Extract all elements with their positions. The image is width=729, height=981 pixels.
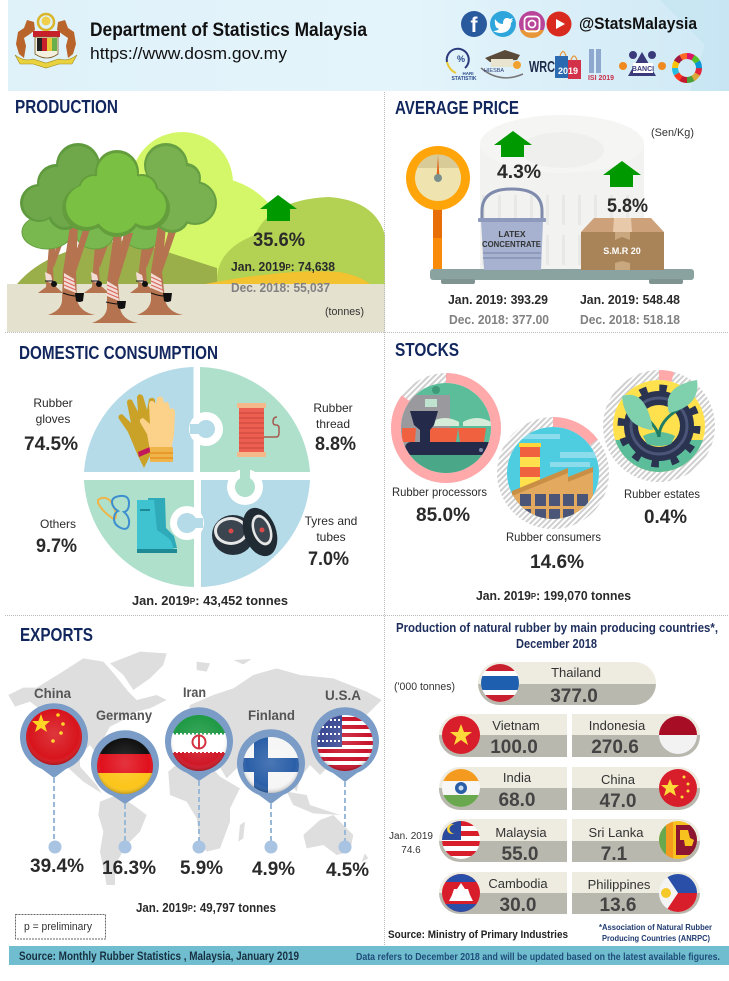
arrow: latex up (494, 131, 532, 157)
pill: china (572, 767, 700, 812)
value: usa: 4.5% (326, 860, 369, 881)
unit: tonnes: (tonnes) (325, 306, 364, 318)
label: rubber gloves: gloves (36, 412, 70, 426)
arrow: smr up (603, 161, 641, 187)
values: latex prices (448, 293, 549, 327)
label: tyres and tubes: 7.0% (308, 549, 349, 570)
left tree (20, 143, 114, 315)
label: others: 9.7% (36, 536, 77, 557)
values: smr prices (580, 293, 680, 327)
total: domestic consumption: P (190, 597, 196, 606)
icon: twitter (490, 11, 516, 37)
illustration: stacked rubber sheets (480, 115, 644, 270)
icon: facebook: f (470, 14, 478, 37)
pill: sri lanka (572, 819, 700, 865)
heading: stocks: STOCKS (395, 340, 459, 360)
total: stocks: Jan. 2019 (476, 589, 532, 603)
total: stocks: : 199,070 tonnes (536, 589, 631, 603)
value: finland: 4.9% (252, 859, 295, 880)
label: rubber processors: 85.0% (416, 505, 470, 526)
legend: preliminary (16, 914, 106, 939)
value: production change: 35.6% (253, 230, 305, 251)
label: rubber estates: 0.4% (644, 507, 687, 528)
value: germany: 16.3% (102, 858, 156, 879)
illustration: rubber plantation (7, 132, 385, 332)
right tree (137, 143, 217, 315)
back trees (22, 215, 162, 293)
value: iran: 5.9% (180, 858, 223, 879)
heading: production by country: December 2018 (516, 637, 597, 651)
event logos (447, 49, 703, 84)
value: january production: P (285, 263, 291, 272)
value: january production: Jan. 2019 (231, 260, 287, 274)
label: rubber gloves: 74.5% (24, 434, 78, 455)
label: rubber thread: 8.8% (315, 434, 356, 455)
pill: malaysia: 55.0 (502, 844, 538, 865)
legend: preliminary: p = preliminary (24, 921, 92, 933)
puzzle pie chart (84, 367, 310, 587)
social handle: @StatsMalaysia (579, 14, 697, 33)
total: exports: P (188, 904, 193, 913)
label: rubber processors: Rubber processors (392, 485, 487, 499)
icon: facebook (461, 11, 487, 37)
source: monthly statistics: Source: Monthly Rubber Statistics , Malaysia, January 2019 (19, 949, 299, 963)
label: concentrate: CONCENTRATE (482, 239, 541, 249)
label: rubber thread: Rubber (313, 401, 353, 415)
pill: china: 47.0 (600, 791, 636, 812)
unit: thousand tonnes: ('000 tonnes) (394, 681, 455, 693)
pill: sri lanka: Sri Lanka (589, 825, 644, 840)
label: china: China (34, 686, 71, 701)
header banner (8, 0, 729, 91)
pin: china (20, 686, 88, 877)
label: rubber thread: thread (316, 417, 350, 431)
chart: rubber estates (608, 375, 710, 480)
pill: thailand: Thailand (551, 665, 601, 680)
pill: china: China (601, 772, 636, 787)
pill: india: 68.0 (499, 790, 535, 811)
panel: domestic consumption (19, 343, 357, 608)
unit: sen per kg: (Sen/Kg) (651, 127, 694, 139)
panel: average price (395, 98, 694, 327)
note: anrpc (599, 923, 712, 943)
world map (8, 652, 382, 885)
total: exports: : 49,797 tonnes (193, 901, 276, 915)
label: others: Others (40, 517, 76, 531)
pill: india: India (503, 770, 532, 785)
source: ministry: Source: Ministry of Primary Industries (388, 929, 568, 941)
label: germany: Germany (96, 708, 152, 723)
label: tyres and tubes: tubes (316, 530, 346, 544)
pin: usa (311, 688, 379, 881)
event logos: ISI 2019 (588, 75, 614, 82)
heading: exports: EXPORTS (20, 625, 93, 645)
value: december production: Dec. 2018: 55,037 (231, 281, 330, 295)
note: malaysia january value (389, 831, 433, 856)
website url: https://www.dosm.gov.my (90, 44, 288, 63)
pin: germany (91, 708, 159, 879)
pill: indonesia: Indonesia (589, 718, 646, 733)
icon: thread spool (237, 403, 279, 457)
pill: cambodia (439, 872, 567, 916)
pill: malaysia: Malaysia (495, 825, 547, 840)
label: rubber consumers (506, 530, 601, 573)
chart: rubber processors (396, 378, 505, 478)
note: anrpc: *Association of Natural Rubber (599, 923, 712, 932)
icon: coat of arms (15, 14, 77, 68)
illustration: weighing scale (406, 146, 694, 284)
event logos: HIESBA (484, 68, 504, 74)
event logos: 2019 (558, 66, 578, 76)
panel: exports (8, 625, 382, 939)
heading: domestic consumption: DOMESTIC CONSUMPTION (19, 343, 218, 363)
total: domestic consumption: Jan. 2019 (132, 594, 188, 608)
value: latex change: 4.3% (497, 162, 541, 183)
icon: youtube (546, 12, 572, 36)
values: smr prices: Dec. 2018: 518.18 (580, 313, 680, 327)
total: stocks: P (531, 592, 537, 601)
values: smr prices: Jan. 2019: 548.48 (580, 293, 680, 307)
note: malaysia january value: Jan. 2019 (389, 831, 433, 842)
label: rubber thread (313, 401, 356, 455)
illustration: latex bucket (478, 189, 546, 270)
label: smr 20: S.M.R 20 (603, 246, 641, 256)
panel: production by country (388, 621, 718, 943)
total: domestic consumption: : 43,452 tonnes (195, 594, 288, 608)
values: latex prices: Dec. 2018: 377.00 (449, 313, 549, 327)
pill: thailand: 377.0 (550, 686, 598, 707)
values: latex prices: Jan. 2019: 393.29 (448, 293, 548, 307)
label: usa: U.S.A (325, 688, 361, 703)
label: rubber estates (624, 487, 700, 528)
heading: department name: Department of Statistics Malaysia (90, 20, 367, 41)
icon: tyres (212, 503, 284, 561)
pill: thailand (478, 662, 656, 707)
event logos: BANCI (632, 66, 654, 73)
arrow: production up (260, 195, 297, 221)
note: anrpc: Producing Countries (ANRPC) (602, 934, 710, 943)
label: rubber processors (392, 485, 487, 526)
label: finland: Finland (248, 708, 295, 723)
heading: average price: AVERAGE PRICE (395, 98, 519, 118)
center tree (62, 150, 170, 323)
value: china: 39.4% (30, 856, 84, 877)
pin: iran (165, 685, 233, 879)
event logos: STATISTIK (451, 76, 477, 82)
icon: instagram (519, 11, 545, 38)
icon: rubber boots (137, 498, 177, 553)
note: malaysia january value: 74.6 (401, 845, 421, 856)
value: january production: : 74,638 (291, 260, 335, 274)
pill: indonesia: 270.6 (591, 737, 639, 758)
label: others (36, 517, 77, 557)
label: tyres and tubes: Tyres and (305, 514, 357, 528)
label: rubber gloves: Rubber (33, 396, 73, 410)
pill: vietnam (439, 714, 567, 758)
label: rubber consumers: Rubber consumers (506, 530, 601, 544)
pill: cambodia: 30.0 (500, 895, 536, 916)
pill: vietnam: 100.0 (490, 737, 538, 758)
icon: rubber bands (98, 496, 129, 529)
pin: finland (237, 708, 305, 880)
illustration: smr box (581, 218, 664, 270)
pill: vietnam: Vietnam (492, 718, 540, 733)
pill: malaysia (439, 819, 567, 865)
panel: stocks (392, 340, 710, 603)
pill: philippines: Philippines (588, 877, 651, 892)
label: rubber gloves (24, 396, 78, 455)
pill: philippines: 13.6 (600, 895, 636, 916)
heading: production: PRODUCTION (15, 97, 118, 117)
label: rubber consumers: 14.6% (530, 552, 584, 573)
pill: indonesia (572, 714, 701, 758)
label: latex: LATEX (498, 229, 526, 239)
total: exports: Jan. 2019 (136, 901, 192, 915)
panel: production (7, 97, 385, 332)
footer bar (9, 946, 729, 965)
label: iran: Iran (183, 685, 206, 700)
heading: production by country (396, 621, 718, 651)
event logos: HARI (462, 71, 474, 76)
pill: india (439, 767, 567, 811)
event logos: % (457, 54, 465, 64)
icon: gloves (118, 394, 175, 468)
label: tyres and tubes (305, 514, 357, 570)
label: rubber estates: Rubber estates (624, 487, 700, 501)
pill: cambodia: Cambodia (488, 876, 548, 891)
pill: sri lanka: 7.1 (601, 844, 628, 865)
pill: philippines (572, 872, 700, 916)
event logos: WRC (529, 59, 555, 76)
chart: rubber consumers (502, 422, 604, 524)
value: smr change: 5.8% (607, 196, 648, 217)
